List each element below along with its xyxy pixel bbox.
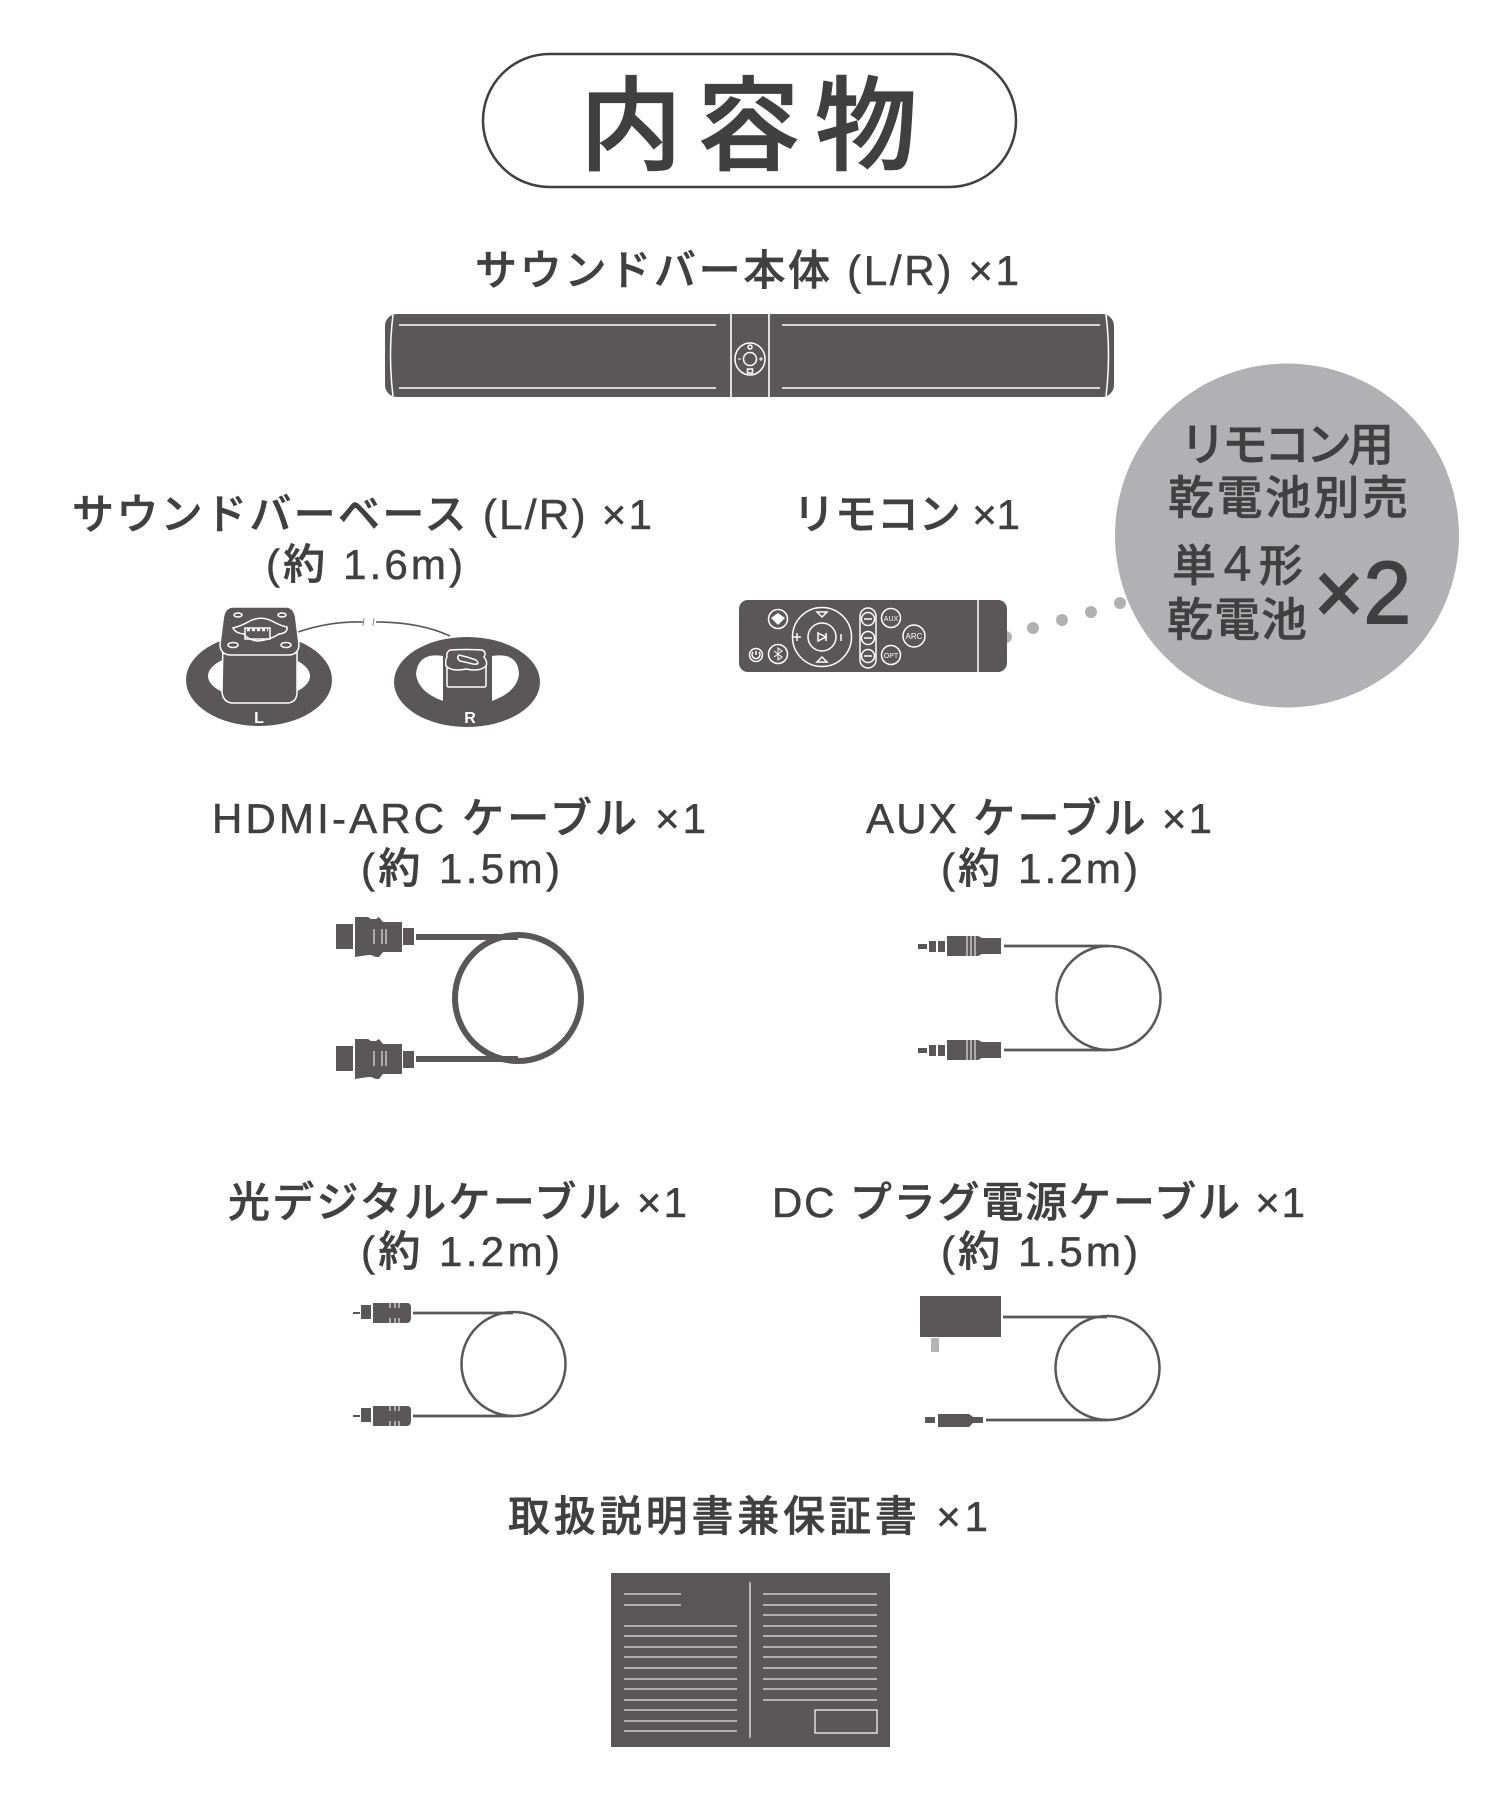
callout line 1: リモコン用 — [1180, 419, 1394, 471]
icon: remote control — [739, 600, 1007, 672]
cable length: HDMI: (約 1.5m) — [361, 845, 560, 892]
base L: L — [254, 710, 264, 727]
icon: DC power cable — [920, 1296, 1160, 1427]
callout line 2: 乾電池別売 — [1168, 472, 1408, 524]
heading: AUX cable: AUX ケーブル ×1 — [866, 795, 1212, 842]
dotted connector — [1000, 597, 1126, 643]
title pill — [483, 54, 1016, 187]
icon: manual — [611, 1573, 890, 1747]
heading: optical cable: 光デジタルケーブル ×1 — [228, 1179, 687, 1226]
heading: soundbar: サウンドバー本体 (L/R) ×1 — [475, 247, 1019, 294]
callout line 3: 単4形 — [1172, 536, 1303, 592]
icon: control knob — [735, 343, 765, 375]
icon: optical cable — [353, 1303, 566, 1426]
cable between bases — [298, 622, 450, 636]
heading: manual: 取扱説明書兼保証書 ×1 — [508, 1493, 988, 1540]
heading: remote: リモコン ×1 — [793, 491, 1020, 538]
title text: 内容物 — [580, 70, 917, 184]
heading: HDMI cable — [212, 795, 706, 892]
heading: DC cable — [772, 1179, 1305, 1275]
cable length: AUX: (約 1.2m) — [941, 845, 1138, 892]
icon: HDMI cable — [336, 917, 581, 1079]
heading: AUX cable — [866, 795, 1212, 892]
heading: HDMI cable: HDMI-ARC ケーブル ×1 — [212, 795, 706, 842]
base L — [185, 607, 333, 729]
cable length: optical: (約 1.2m) — [361, 1228, 560, 1275]
heading: DC cable: DC プラグ電源ケーブル ×1 — [772, 1179, 1305, 1226]
heading: soundbar base — [72, 491, 652, 588]
cable length: base: (約 1.6m) — [266, 541, 463, 588]
icon: remote control: OPT — [884, 653, 899, 660]
callout multiplier: ×2 — [1314, 543, 1411, 642]
icon: remote control: AUX — [884, 616, 899, 623]
icon: AUX cable — [918, 936, 1160, 1060]
heading: optical cable — [228, 1179, 687, 1275]
icon: soundbar — [385, 313, 1114, 397]
base R — [393, 637, 541, 730]
icon: soundbar bases — [185, 607, 541, 730]
base R: R — [464, 710, 476, 727]
callout: batteries sold separately — [1115, 364, 1459, 708]
icon: remote control: ARC — [906, 632, 923, 641]
cable length: DC: (約 1.5m) — [941, 1228, 1138, 1275]
heading: soundbar base: サウンドバーベース (L/R) ×1 — [72, 491, 652, 538]
callout line 4: 乾電池 — [1167, 594, 1307, 646]
